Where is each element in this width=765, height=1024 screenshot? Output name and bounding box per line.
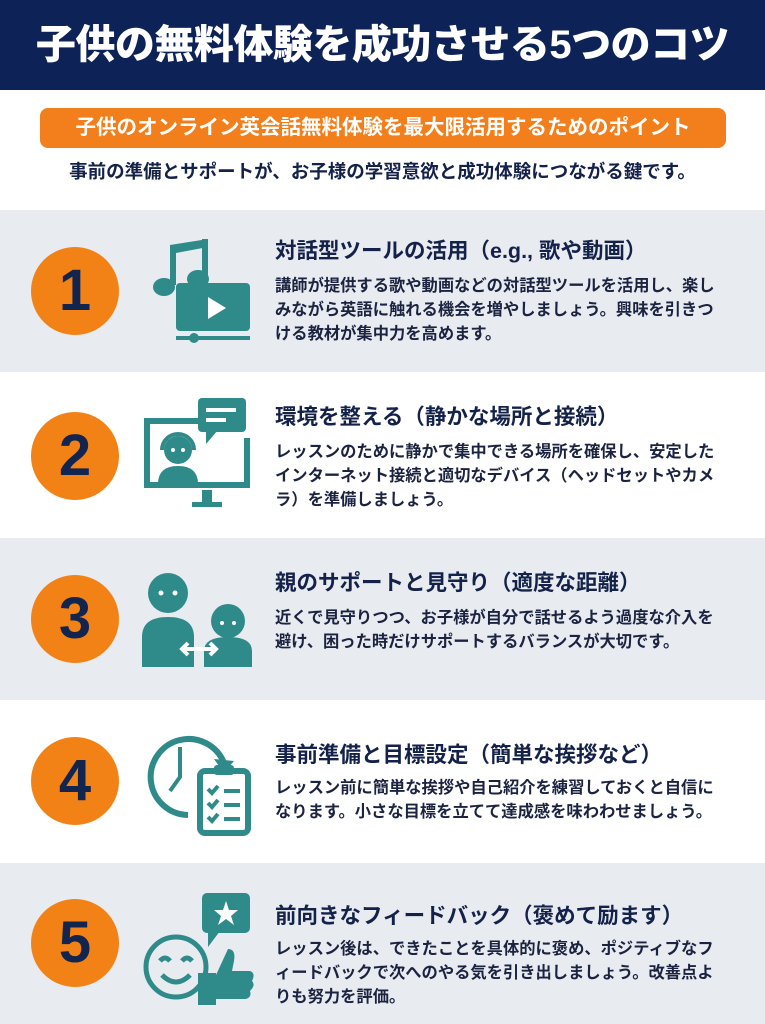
heading 2: 環境を整える（静かな場所と接続） bbox=[275, 405, 618, 429]
icon: online teacher monitor bbox=[144, 398, 250, 507]
number 5: 5 bbox=[59, 910, 91, 975]
subtitle: 事前の準備とサポートが、お子様の学習意欲と成功体験につながる鍵です。 bbox=[69, 161, 696, 182]
panel: tip 2 bbox=[31, 398, 714, 509]
text 3: 近くで見守りつつ、お子様が自分で話せるよう過度な介入を避け、困った時だけサポートするバランスが大切です。 bbox=[275, 609, 714, 651]
icon: smile thumbs up bbox=[144, 893, 254, 1005]
text 2: レッスンのために静かで集中できる場所を確保し、安定したインターネット接続と適切なデバイス（ヘッドセットやカメラ）を準備しましょう。 bbox=[275, 443, 714, 509]
heading 1: 対話型ツールの活用（e.g., 歌や動画） bbox=[275, 239, 646, 263]
text 4: レッスン前に簡単な挨拶や自己紹介を練習しておくと自信になります。小さな目標を立てて達成感を味わわせましょう。 bbox=[275, 779, 714, 821]
title bbox=[0, 0, 765, 90]
heading 4: 事前準備と目標設定（簡単な挨拶など） bbox=[275, 743, 662, 767]
banner bbox=[40, 108, 726, 148]
icon: clock and checklist bbox=[148, 736, 251, 836]
panel: tip 3 bbox=[0, 538, 765, 700]
panel: tip 5 bbox=[0, 863, 765, 1024]
panel: tip 1 bbox=[0, 210, 765, 372]
icon: parent and child bbox=[142, 573, 252, 667]
icon: music and video bbox=[153, 239, 250, 343]
heading 5: 前向きなフィードバック（褒めて励ます） bbox=[275, 904, 683, 928]
title: 子供の無料体験を成功させる5つのコツ bbox=[36, 23, 729, 67]
number 1 bbox=[31, 247, 119, 335]
text 1: 講師が提供する歌や動画などの対話型ツールを活用し、楽しみながら英語に触れる機会を増やしましょう。興味を引きつける教材が集中力を高めます。 bbox=[275, 277, 715, 343]
number 2 bbox=[31, 412, 119, 500]
heading 3: 親のサポートと見守り（適度な距離） bbox=[275, 571, 641, 595]
number 3: 3 bbox=[59, 586, 91, 651]
number 1: 1 bbox=[59, 258, 91, 323]
number 4 bbox=[31, 737, 119, 825]
panel: tip 4 bbox=[31, 736, 714, 836]
number 2: 2 bbox=[59, 423, 91, 488]
number 3 bbox=[31, 575, 119, 663]
number 4: 4 bbox=[59, 748, 91, 813]
text 5: レッスン後は、できたことを具体的に褒め、ポジティブなフィードバックで次へのやる気を引き出しましょう。改善点よりも努力を評価。 bbox=[275, 940, 714, 1006]
number 5 bbox=[31, 899, 119, 987]
banner: 子供のオンライン英会話無料体験を最大限活用するためのポイント bbox=[76, 116, 690, 139]
